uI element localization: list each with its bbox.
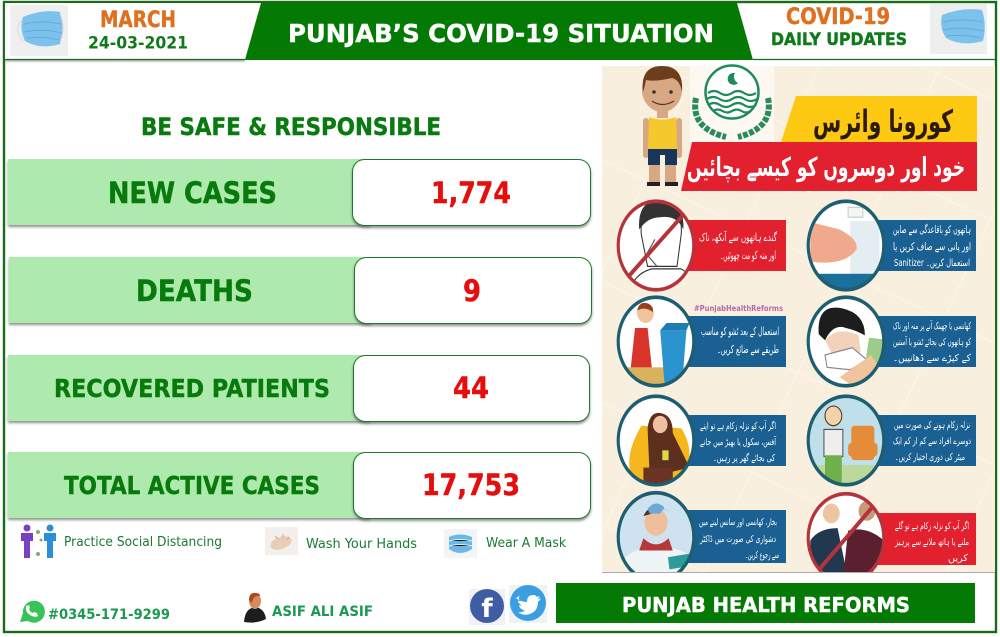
card: dispose tissue: استعمال کے بعد ٹشو کو مناسب [701, 325, 779, 338]
card: stay home: آفس، سکول یا بھیڑ میں جانے [700, 435, 776, 448]
card: wash hands: Sanitizer استعمال کریں۔ [894, 258, 970, 269]
card: stay home: کی بجائے گھر پر رہیں۔ [713, 452, 775, 464]
icon: mask [444, 529, 477, 558]
stat row: recovered patients: 44 [453, 371, 489, 405]
icon: whatsapp [20, 601, 45, 623]
icon: person [244, 593, 266, 623]
icon: facebook: f [481, 594, 493, 624]
card: keep distance [807, 395, 976, 490]
card: do not touch face: اور منہ کو مت چھوئیں۔ [720, 249, 776, 262]
author credit: ASIF ALI ASIF [272, 604, 373, 620]
card: cover cough [807, 296, 976, 392]
card: see a doctor: سے رجوع کریں۔ [745, 550, 779, 561]
yellow title band [781, 96, 977, 142]
stat row: new cases: 1,774 [431, 176, 511, 210]
tip: wear mask: Wear A Mask [486, 535, 566, 551]
punjab government emblem [690, 66, 774, 142]
stat row: recovered patients: RECOVERED PATIENTS [54, 374, 330, 403]
icon: washing hands [265, 527, 298, 555]
date label: 24-03-2021 [88, 34, 188, 54]
tip: wash hands [265, 527, 417, 555]
stat row: total active cases: TOTAL ACTIVE CASES [64, 471, 320, 500]
stat row: new cases: NEW CASES [108, 176, 277, 210]
icon: face mask right [930, 4, 987, 54]
daily updates heading: COVID-19 [786, 5, 890, 30]
daily updates subheading: DAILY UPDATES [771, 30, 907, 49]
icon: facebook [469, 589, 505, 625]
whatsapp contact [20, 601, 170, 623]
banner: punjab health reforms: PUNJAB HEALTH REFORMS [622, 593, 910, 617]
header right panel [753, 4, 995, 60]
card: see a doctor: بخار، کھانسی اور سانس لینے میں [699, 517, 777, 528]
tip: social distancing: Practice Social Distancing [64, 534, 222, 550]
card: stay home: اگر آپ کو نزلہ زکام ہے تو اپنے [700, 419, 776, 432]
header title banner [245, 3, 753, 60]
card: see a doctor [616, 490, 786, 572]
tip: wash hands: Wash Your Hands [306, 536, 417, 552]
header title banner: PUNJAB’S COVID-19 SITUATION [288, 19, 714, 48]
card: do not touch face [617, 200, 786, 295]
stat row: deaths: DEATHS [136, 274, 253, 308]
stat row: total active cases [8, 452, 590, 518]
heading: be safe: BE SAFE & RESPONSIBLE [141, 113, 441, 141]
icon: face mask left [10, 5, 68, 56]
banner: punjab health reforms [556, 583, 975, 623]
poster boy illustration [642, 66, 682, 186]
poster: coronavirus safety [602, 66, 995, 590]
card: do not touch face: گندے ہاتھوں سے آنکھ، ناک [699, 230, 777, 244]
hashtag: #PunjabHealthReforms [694, 304, 783, 313]
card: avoid handshakes: کریں [948, 553, 968, 564]
icon: two people [21, 524, 56, 558]
card: cover cough: کے کپڑے سے ڈھانپیں۔ [893, 353, 971, 364]
header left panel [5, 3, 261, 60]
card: dispose tissue: طریقے سے ضائع کریں۔ [717, 343, 779, 356]
stat row: deaths [9, 257, 592, 324]
tip: social distancing [21, 524, 222, 558]
author credit [244, 593, 373, 623]
month label: MARCH [100, 8, 176, 33]
card: avoid handshakes [806, 492, 976, 572]
stat row: new cases [8, 159, 590, 226]
stat row: deaths: 9 [463, 274, 481, 308]
header [5, 3, 995, 60]
card: wash hands [807, 200, 976, 293]
whatsapp contact: #0345-171-9299 [48, 607, 170, 623]
stat row: recovered patients [8, 355, 590, 422]
card: dispose tissue [617, 296, 786, 392]
red title band [681, 142, 977, 191]
card: see a doctor: دشواری کی صورت میں ڈاکٹر [699, 534, 776, 545]
icon: twitter [509, 585, 547, 623]
card: stay home [617, 395, 786, 492]
tip: wear mask [444, 529, 566, 558]
stat row: total active cases: 17,753 [422, 468, 520, 502]
